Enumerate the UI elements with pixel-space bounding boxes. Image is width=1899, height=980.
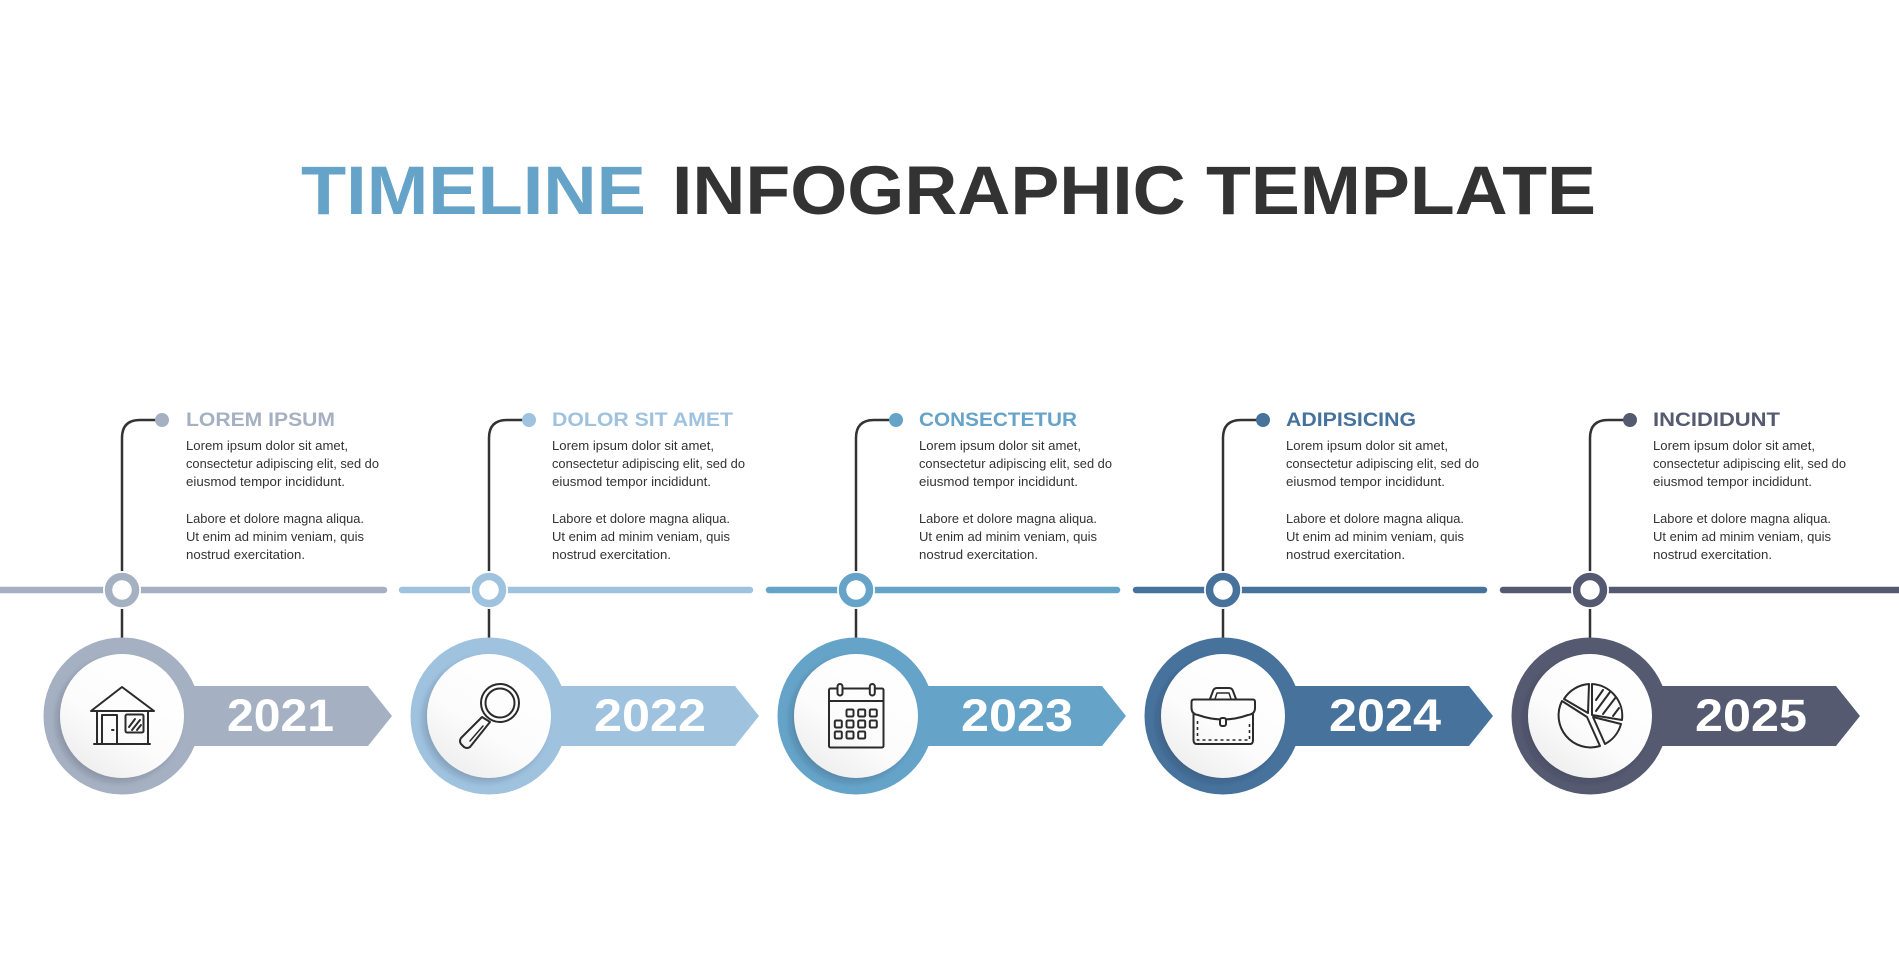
text block 2023: Labore et dolore magna aliqua. [919,512,1097,526]
white badge 2023 [794,654,918,778]
text block 2025: Lorem ipsum dolor sit amet, [1653,439,1815,453]
text block 2024: Labore et dolore magna aliqua. [1286,512,1464,526]
panel: 2023 step [769,409,1126,794]
connector dot 2024 [1256,413,1270,427]
text block 2022: Labore et dolore magna aliqua. [552,512,730,526]
timeline node 2021 [103,571,141,609]
text block 2023: Ut enim ad minim veniam, quis [919,530,1097,544]
year arrow 2022 [547,686,759,746]
icon: house [91,687,154,744]
year arrow 2024 [1281,686,1493,746]
year arrow 2021 [180,686,392,746]
text block 2025: consectetur adipiscing elit, sed do [1653,457,1846,471]
text block 2023: eiusmod tempor incididunt. [919,475,1078,489]
connector line 2021 [122,420,160,638]
text block 2024: Lorem ipsum dolor sit amet, [1286,439,1448,453]
text block 2021: Ut enim ad minim veniam, quis [186,530,364,544]
white badge 2021 [60,654,184,778]
text block 2024: eiusmod tempor incididunt. [1286,475,1445,489]
year 2025: 2025 [1695,690,1807,741]
large badge ring 2024 [1144,638,1302,794]
title [301,152,1596,229]
text block 2023: nostrud exercitation. [919,548,1038,562]
connector dot 2021 [155,413,169,427]
timeline segment 2024 [1136,587,1484,593]
connector dot 2023 [889,413,903,427]
text block 2022: nostrud exercitation. [552,548,671,562]
timeline segment 2022 [402,587,750,593]
icon: briefcase [1192,688,1255,744]
panel: 2022 step [402,409,759,794]
timeline segment 2021 [0,587,384,593]
text block 2025: nostrud exercitation. [1653,548,1772,562]
heading: Consectetur: CONSECTETUR [919,409,1077,431]
white badge 2025 [1528,654,1652,778]
connector dot 2025 [1623,413,1637,427]
text block 2021: eiusmod tempor incididunt. [186,475,345,489]
text block 2024 [1286,439,1479,562]
text block 2021: Lorem ipsum dolor sit amet, [186,439,348,453]
timeline node 2024 [1204,571,1242,609]
large badge ring 2023 [778,638,934,794]
text block 2025: Ut enim ad minim veniam, quis [1653,530,1831,544]
icon: calendar [829,684,884,748]
white badge 2024 [1161,654,1285,778]
heading: Dolor Sit Amet: DOLOR SIT AMET [552,409,733,431]
text block 2023: consectetur adipiscing elit, sed do [919,457,1112,471]
large badge ring 2022 [410,638,568,794]
connector line 2023 [856,420,894,638]
connector line 2025 [1590,420,1628,638]
text block 2025: eiusmod tempor incididunt. [1653,475,1812,489]
large badge ring 2021 [44,638,200,794]
year arrow 2025 [1648,686,1860,746]
text block 2023 [919,439,1112,562]
heading: Adipisicing: ADIPISICING [1286,409,1416,431]
large badge ring 2025 [1512,638,1668,794]
connector dot 2022 [522,413,536,427]
text block 2023: Lorem ipsum dolor sit amet, [919,439,1081,453]
timeline node 2023 [837,571,875,609]
year 2024: 2024 [1329,690,1441,741]
text block 2022: consectetur adipiscing elit, sed do [552,457,745,471]
text block 2024: nostrud exercitation. [1286,548,1405,562]
title: INFOGRAPHIC TEMPLATE [672,152,1596,229]
text block 2022: Ut enim ad minim veniam, quis [552,530,730,544]
text block 2022 [552,439,745,562]
timeline segment 2025 [1503,587,1899,593]
text block 2021 [186,439,379,562]
text block 2022: Lorem ipsum dolor sit amet, [552,439,714,453]
timeline segment 2023 [769,587,1117,593]
heading: Lorem Ipsum: LOREM IPSUM [186,409,335,431]
text block 2021: nostrud exercitation. [186,548,305,562]
panel: 2021 step [0,409,392,794]
icon: pie chart [1559,684,1622,747]
text block 2024: consectetur adipiscing elit, sed do [1286,457,1479,471]
title: TIMELINE [301,152,646,229]
panel: 2025 step [1503,409,1899,794]
white badge 2022 [427,654,551,778]
connector line 2022 [489,420,527,638]
panel: 2024 step [1136,409,1493,794]
timeline node 2025 [1571,571,1609,609]
text block 2025: Labore et dolore magna aliqua. [1653,512,1831,526]
connector line 2024 [1223,420,1261,638]
text block 2021: consectetur adipiscing elit, sed do [186,457,379,471]
icon: magnifying glass [460,684,519,748]
year 2023: 2023 [961,690,1073,741]
heading: Incididunt: INCIDIDUNT [1653,409,1780,431]
timeline node 2022 [470,571,508,609]
text block 2024: Ut enim ad minim veniam, quis [1286,530,1464,544]
text block 2022: eiusmod tempor incididunt. [552,475,711,489]
text block 2021: Labore et dolore magna aliqua. [186,512,364,526]
year 2021: 2021 [227,690,334,741]
year arrow 2023 [914,686,1126,746]
year 2022: 2022 [594,690,706,741]
text block 2025 [1653,439,1846,562]
